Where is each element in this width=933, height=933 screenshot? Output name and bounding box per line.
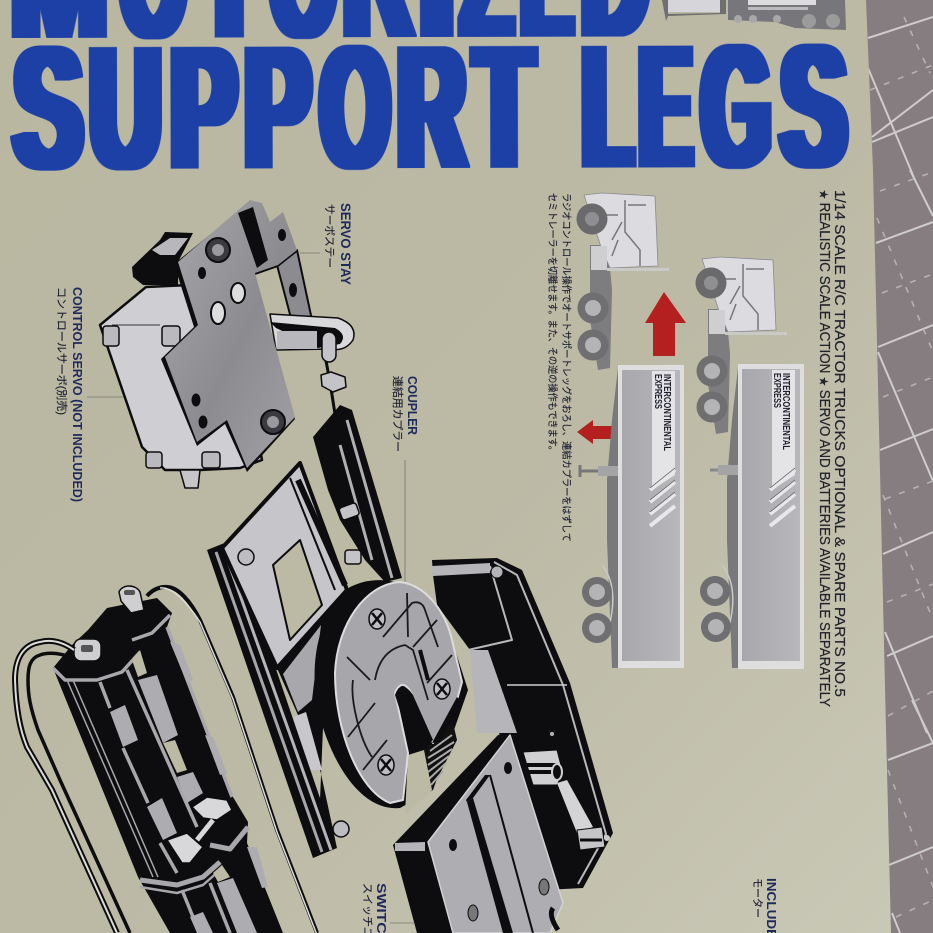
label: servo stay: サーボステー [323,204,336,268]
box gray face [428,735,563,933]
trailer logo [771,373,791,450]
illustration: battery holder [53,586,283,933]
trailer logo: EXPRESS [652,374,663,409]
trailer logo: INTERCONTINENTAL [780,373,791,450]
label: coupler [391,376,420,590]
title line 2: T [475,9,533,204]
servo stay plate [165,200,297,468]
title: MOTORIZED SUPPORT LEGS [10,0,846,205]
disc ribs [347,593,452,770]
label: switch: SWITCH [374,883,389,933]
label: included motor: モーター [751,878,764,918]
label: control servo [55,287,130,502]
label: switch [361,883,414,933]
trailer logo [652,374,672,451]
tagline: scale and action notes [816,190,848,707]
tagline line 1: 1/14 SCALE R/C TRACTOR TRUCKS OPTIONAL & SPARE PARTS NO.5 [831,190,848,697]
truck fragment at top [662,0,846,30]
label: control servo: CONTROL SERVO (NOT INCLUDED) [70,287,85,502]
rail [207,540,337,858]
servo horn arm [270,314,354,350]
inner standoffs [523,750,563,785]
title line 2: E [640,8,691,203]
tagline line 2: ★ REALISTIC SCALE ACTION ★ SERVO AND BATTERIES AVAILABLE SEPARATELY [816,190,833,707]
illustration: coupler mount plate [207,405,402,858]
label: servo stay [300,203,353,285]
disc dark side [315,580,468,808]
label: servo stay: SERVO STAY [338,203,353,285]
wedge area beside disc [277,590,360,848]
illustration: switch box [393,733,610,933]
windows [132,650,230,882]
box holes and screws [504,762,512,774]
truck 1: tractor, separated [576,193,669,370]
truck 2: trailer [700,364,804,669]
gear teeth [423,723,457,787]
title line 2: P [245,9,310,204]
box black body [393,733,563,933]
spring clips [167,797,232,863]
title line 2: U [90,10,161,205]
japanese description [546,193,573,542]
battery gray slots [110,642,268,933]
illustration: semicircular coupler disc [315,580,468,815]
title line 2: S [781,8,846,203]
servo body [100,285,262,470]
arrow: landing legs lowered [577,420,612,444]
upper bracket [313,405,402,582]
illustration: control servo and stay [100,200,354,510]
truck 2: tractor, coupled [696,257,787,434]
title line 2: R [398,9,465,204]
title line 2: G [702,8,770,203]
title line 2: P [171,9,236,205]
title line 2: L [583,9,632,204]
japanese line 1: ラジオコントロール操作でオートサポートレッグをおろし、連結カプラーをはずして [560,193,573,542]
terminals [74,586,144,661]
disc face [335,582,462,803]
end cap bands [53,615,170,680]
trailer logo: EXPRESS [771,373,782,408]
label: coupler: COUPLER [405,376,420,436]
hook slot [395,686,433,748]
plate panel [222,463,347,668]
truck 1: trailer [580,365,684,668]
illustration: gearbox [432,558,613,890]
title line 2: O [321,9,389,204]
plate window [273,540,322,640]
servo top dark section [132,232,193,285]
title line 2: S [14,10,82,205]
japanese line 2: セミトレーラーを切離せます。また、その逆の操作もできます。 [546,193,559,455]
label: included motor [751,878,779,933]
disc screws [369,609,450,775]
label: control servo: コントロールサーボ(別売) [55,287,68,415]
servo stay rear arm [277,250,312,322]
wires [15,587,317,933]
arrow: tractor pulls forward [645,292,686,356]
trailer logo: INTERCONTINENTAL [661,374,672,451]
long rails [67,680,158,877]
plate screws and holes [192,229,286,434]
servo stay plate shadow edge [161,202,297,472]
label: coupler: 連結用カプラー [391,376,405,452]
beige gap below hook [405,750,432,815]
body [53,598,283,933]
ball link and rod [323,345,350,510]
